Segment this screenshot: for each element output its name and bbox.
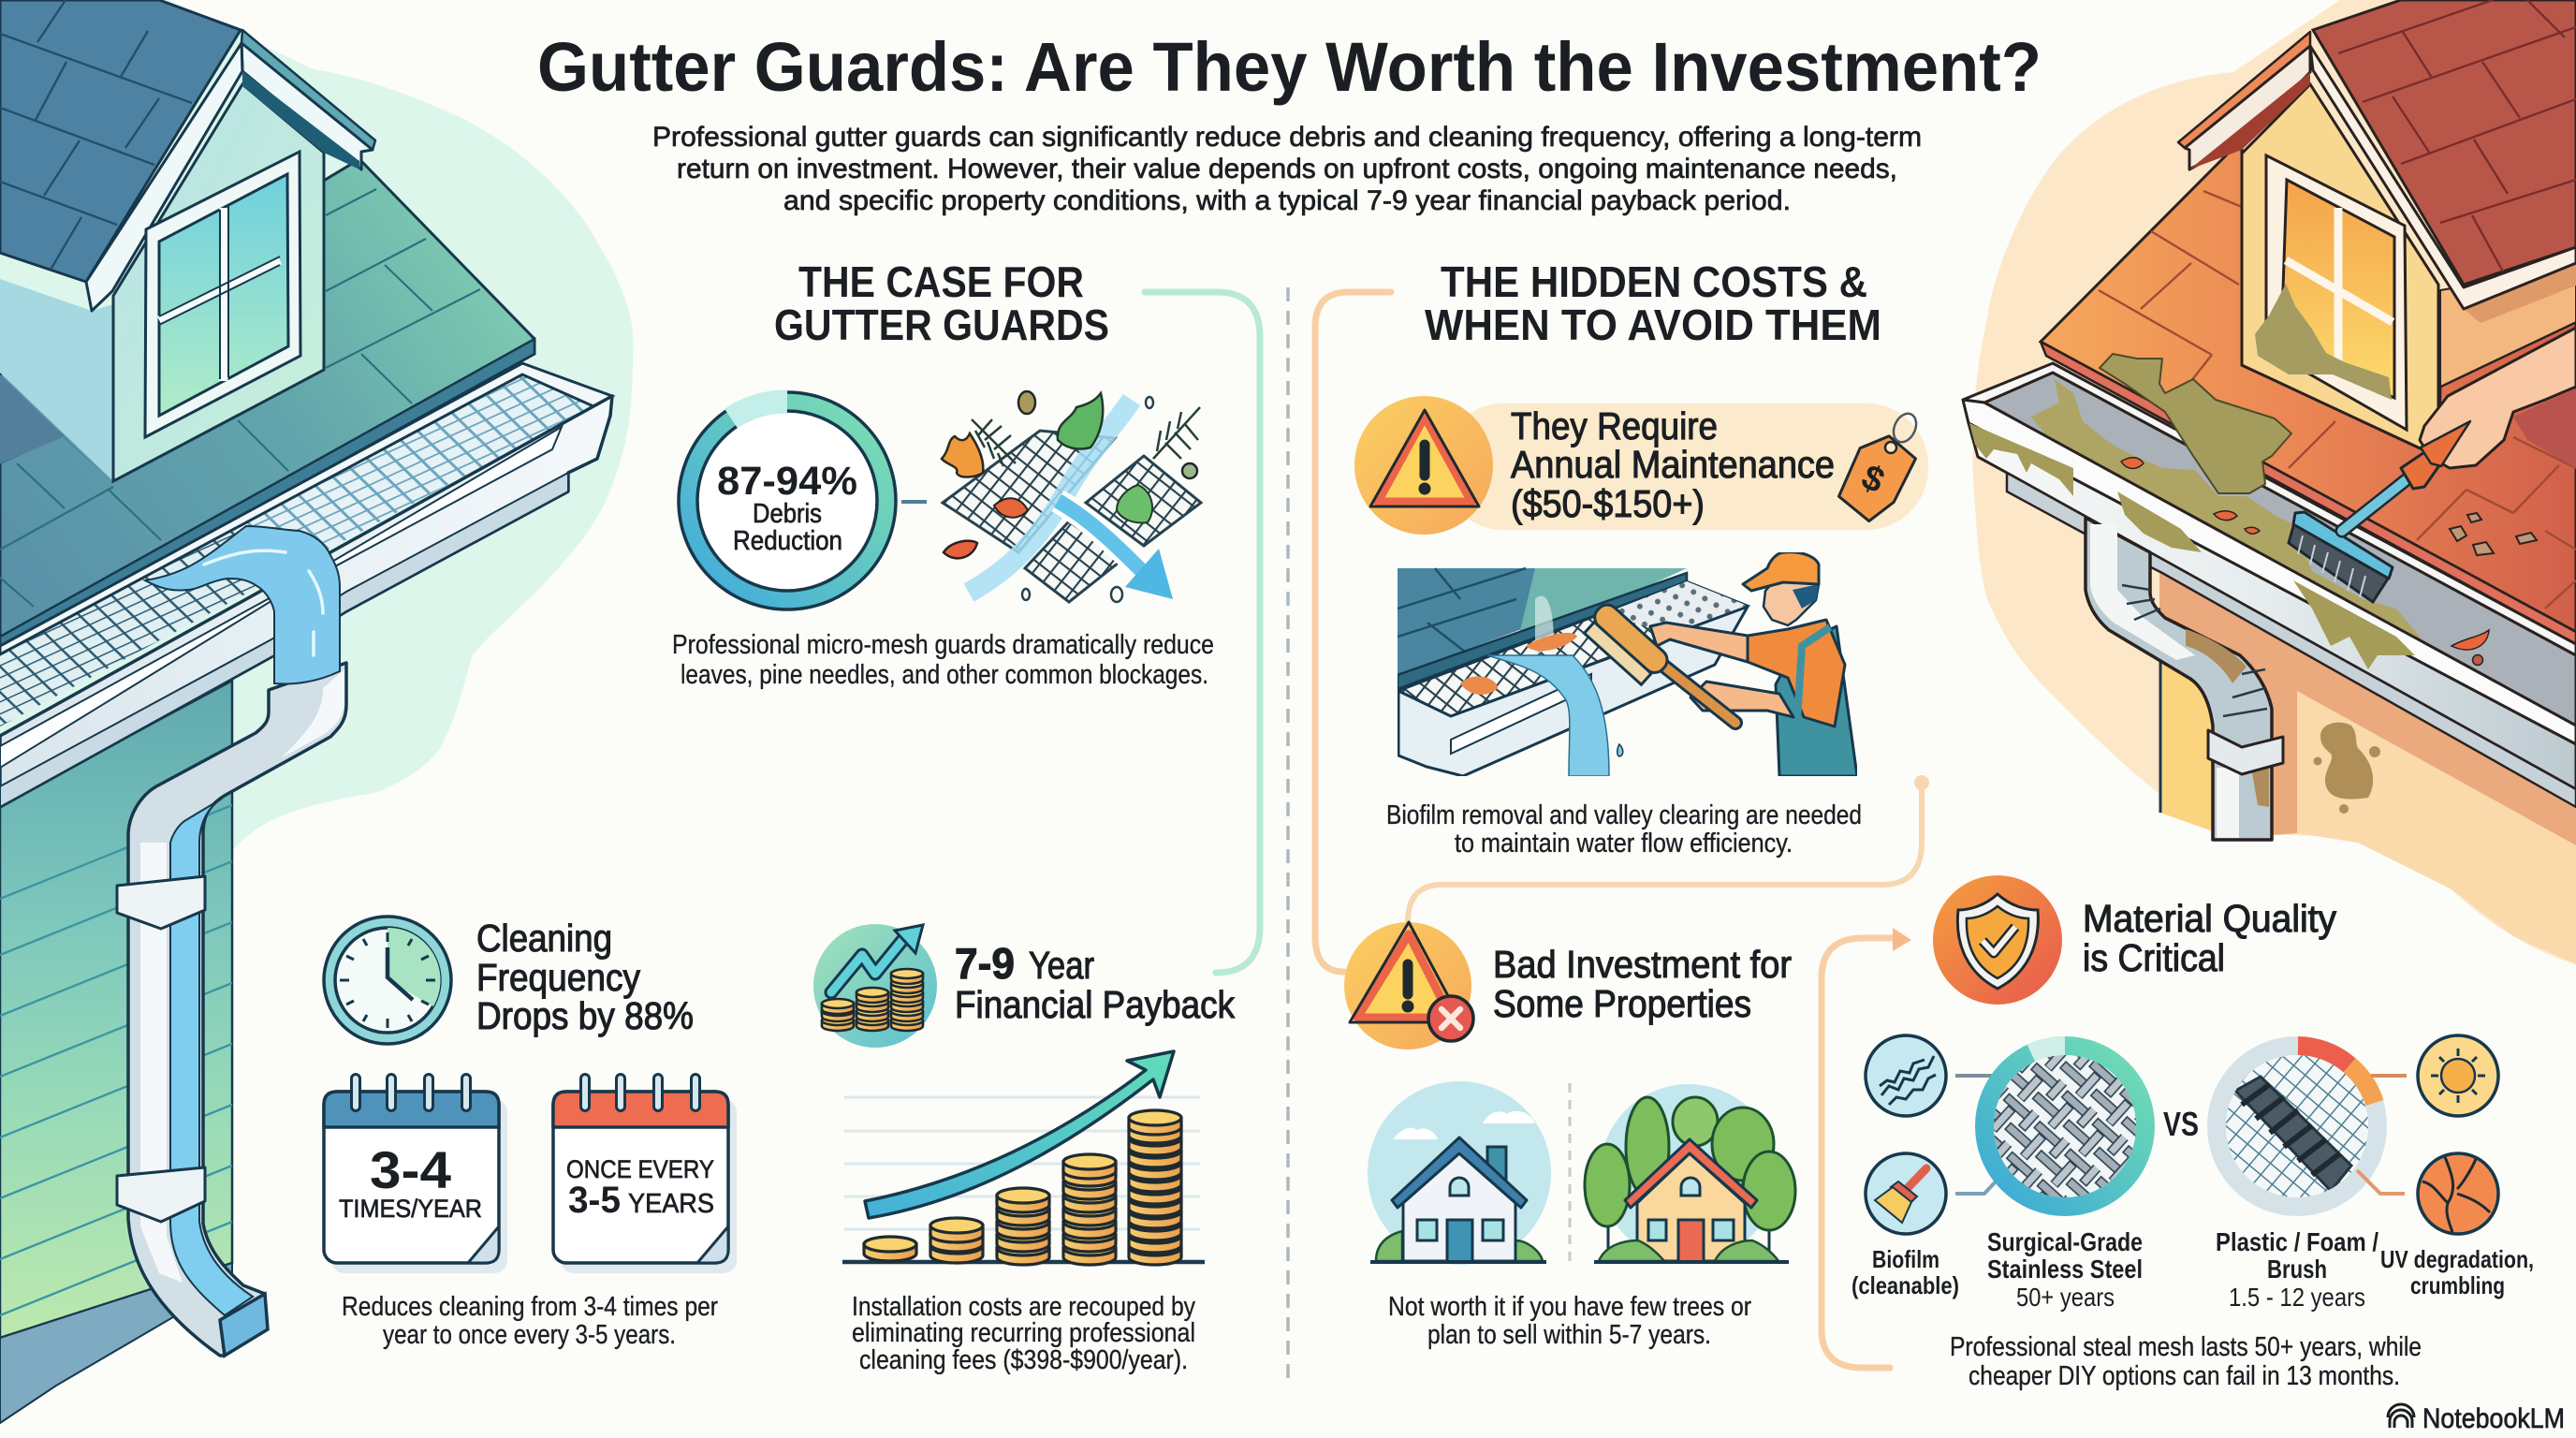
roof moss patch <box>2100 354 2291 493</box>
label: uv degradation: crumbling <box>2410 1271 2505 1299</box>
downspout highlight <box>140 669 344 1283</box>
description <box>852 1292 1195 1375</box>
front muck drips <box>1969 423 2415 669</box>
orange connector with arrow <box>1822 928 1911 1368</box>
label: biofilm: (cleanable) <box>1852 1271 1959 1299</box>
downspout bracket upper <box>117 876 205 929</box>
green connector <box>1145 292 1260 973</box>
description: eliminating recurring professional <box>852 1318 1195 1348</box>
donut chart: 87-94% <box>717 459 857 504</box>
heading: 7-9 <box>955 939 1015 988</box>
description: Reduces cleaning from 3-4 times per <box>342 1292 718 1322</box>
icon: warning with x <box>1344 922 1473 1049</box>
wall base <box>0 1263 232 1423</box>
description: cheaper DIY options can fail in 13 months. <box>1969 1361 2400 1391</box>
description <box>342 1292 718 1350</box>
heading pill <box>1442 404 1928 530</box>
heading <box>2083 897 2336 979</box>
calendar: before: TIMES/YEAR <box>339 1195 482 1223</box>
wall lower panel <box>2297 691 2576 964</box>
dormer face <box>113 84 324 481</box>
panel: cleaning frequency <box>324 917 737 1350</box>
wall stain <box>2314 723 2380 814</box>
label: biofilm <box>1852 1245 1959 1299</box>
upper roof <box>2313 0 2576 285</box>
orange connector left <box>1315 292 1391 972</box>
connector <box>1955 1074 1992 1078</box>
chart: coin stacks growth <box>842 1051 1205 1265</box>
roof debris <box>2450 513 2537 555</box>
description <box>1386 800 1862 858</box>
description: year to once every 3-5 years. <box>383 1320 676 1350</box>
gutter leaves in muck <box>2121 458 2260 534</box>
left house illustration <box>0 0 612 1423</box>
downspout stain <box>2186 629 2269 807</box>
connector <box>1955 1181 1996 1194</box>
gutter water flow <box>145 526 340 683</box>
wall yellow <box>2160 658 2213 831</box>
downspout <box>2086 518 2272 840</box>
dormer soffit <box>242 71 359 169</box>
label: plastic foam brush <box>2216 1227 2378 1312</box>
description: leaves, pine needles, and other common blockages. <box>681 660 1208 690</box>
heading: ($50-$150+) <box>1511 482 1705 525</box>
icon: house with many trees <box>1585 1084 1795 1262</box>
icon: cracked surface <box>2418 1153 2498 1234</box>
heading: hidden costs <box>1425 257 1881 349</box>
orange connector middle <box>1408 775 1929 922</box>
description <box>1388 1292 1751 1350</box>
icon: shield <box>1933 875 2062 1005</box>
downspout collar <box>2208 730 2283 774</box>
gutter lower band <box>0 473 568 807</box>
dormer side shadow <box>2464 263 2576 323</box>
right gable trim <box>2310 46 2576 309</box>
gutter back lip <box>1963 363 2576 655</box>
heading: Financial Payback <box>955 983 1235 1026</box>
gutter interior <box>1984 373 2576 726</box>
steel mesh circle <box>1984 1046 2145 1207</box>
downspout ridges <box>2122 585 2267 716</box>
label: stainless steel: 50+ years <box>2016 1283 2115 1312</box>
dormer side wall <box>0 279 113 481</box>
wall <box>0 681 232 1338</box>
label: plastic foam brush: 1.5 - 12 years <box>2229 1283 2365 1312</box>
gutter crumb <box>2473 655 2482 665</box>
heading: Annual Maintenance <box>1511 443 1835 486</box>
gutter highlight <box>0 427 562 768</box>
gutter muck <box>2031 379 2434 651</box>
downspout water stripe <box>170 799 253 1315</box>
gutter front lip <box>1963 400 2576 744</box>
heading: Bad Investment for <box>1493 943 1792 986</box>
downspout outlet <box>220 1294 268 1356</box>
heading: They Require <box>1511 404 1718 448</box>
calendar: after: YEARS <box>628 1189 714 1219</box>
description: cleaning fees ($398-$900/year). <box>859 1345 1188 1375</box>
icon: biofilm texture <box>1866 1035 1946 1116</box>
wall band <box>2159 562 2576 845</box>
calendar: before: 3-4 <box>370 1140 451 1199</box>
description: Professional micro-mesh guards dramatically reduce <box>672 630 1214 660</box>
gutter mesh <box>0 374 593 726</box>
downspout bracket lower <box>117 1167 205 1222</box>
panel: financial payback <box>813 924 1235 1375</box>
heading: Year <box>1029 944 1094 987</box>
intro paragraph: Professional gutter guards can significantly reduce debris and cleaning frequency, offering a long-term <box>652 122 1922 153</box>
connector dash <box>901 500 927 504</box>
panel: debris reduction <box>672 391 1214 690</box>
icon: sun <box>2418 1035 2498 1116</box>
left rake strip <box>2178 32 2310 148</box>
heading: the case for gutter guards: GUTTER GUARDS <box>774 301 1109 349</box>
description: Biofilm removal and valley clearing are needed <box>1386 800 1862 830</box>
brush <box>2289 421 2470 602</box>
label: plastic foam brush: Plastic / Foam / <box>2216 1227 2378 1256</box>
gable left trim <box>86 43 242 311</box>
heading <box>1511 404 1835 525</box>
eave shadow band <box>0 339 534 650</box>
connector <box>2371 1074 2407 1078</box>
label: biofilm: Biofilm <box>1872 1245 1939 1273</box>
label: stainless steel: Surgical-Grade <box>1987 1227 2143 1256</box>
label: stainless steel: Stainless Steel <box>1987 1255 2143 1284</box>
upper roof <box>0 0 241 282</box>
panel: annual maintenance <box>1354 396 1928 858</box>
calendar: before <box>324 1078 507 1273</box>
description: Installation costs are recouped by <box>852 1292 1195 1322</box>
panel: bad investment <box>1344 922 1795 1350</box>
icon: clock <box>324 917 451 1044</box>
dormer side wall <box>2440 267 2576 387</box>
center dashed divider <box>1286 287 1290 1380</box>
icon: mesh with water and leaves <box>942 391 1201 602</box>
wall left line <box>2159 658 2162 813</box>
dormer face <box>2242 84 2438 457</box>
roof shadow <box>0 374 109 479</box>
dormer window <box>2255 155 2407 430</box>
label: uv degradation <box>2380 1245 2534 1299</box>
handle grip <box>2421 421 2470 466</box>
eave edge <box>2041 342 2576 644</box>
gable top strip <box>242 30 375 150</box>
icon: price tag <box>1837 410 1921 524</box>
background blob: peach <box>1973 0 2576 964</box>
background blob: mint <box>0 0 634 880</box>
left soffit <box>2189 72 2310 169</box>
illustration: worker cleaning gutter <box>1398 552 1857 776</box>
label: uv degradation: UV degradation, <box>2380 1245 2534 1273</box>
gutter front face <box>1969 423 2576 789</box>
intro paragraph: and specific property conditions, with a typical 7-9 year financial payback period. <box>783 185 1791 216</box>
connector <box>2357 1170 2405 1194</box>
description: plan to sell within 5-7 years. <box>1427 1320 1711 1350</box>
heading <box>476 917 694 1037</box>
main roof <box>2041 139 2576 632</box>
gable right trim <box>242 43 373 169</box>
main roof <box>0 159 534 650</box>
heading: Material Quality <box>2083 897 2336 940</box>
gutter back lip <box>0 363 612 654</box>
description: to maintain water flow efficiency. <box>1455 829 1793 858</box>
donut chart <box>679 392 896 609</box>
downspout highlight <box>2090 524 2239 838</box>
heading <box>955 939 1235 1026</box>
title: Gutter Guards: Are They Worth the Investment? <box>537 28 2042 106</box>
vs: VS <box>2163 1105 2199 1143</box>
heading: hidden costs: WHEN TO AVOID THEM <box>1425 301 1881 349</box>
plastic brush circle <box>2217 1046 2378 1207</box>
fascia <box>2007 473 2576 807</box>
downspout <box>128 663 346 1356</box>
label: stainless steel <box>1987 1227 2143 1312</box>
intro paragraph <box>652 122 1922 216</box>
icon: warning <box>1354 396 1493 535</box>
near gutter mesh <box>0 529 305 726</box>
panel: material quality <box>1852 875 2534 1391</box>
calendar: after: 3-5 <box>568 1180 621 1221</box>
description: Not worth it if you have few trees or <box>1388 1292 1751 1322</box>
left gable trim <box>2185 46 2310 169</box>
icon: house with few trees <box>1368 1081 1551 1265</box>
description: Professional steal mesh lasts 50+ years, while <box>1950 1332 2422 1362</box>
heading: Cleaning <box>476 917 612 960</box>
hand <box>2420 328 2576 468</box>
intro paragraph: return on investment. However, their value depends on upfront costs, ongoing maintenance needs, <box>677 154 1897 184</box>
heading: Some Properties <box>1493 982 1751 1025</box>
icon: cleaning brush <box>1866 1153 1946 1234</box>
heading: hidden costs: THE HIDDEN COSTS & <box>1441 257 1867 306</box>
label: plastic foam brush: Brush <box>2267 1255 2327 1284</box>
donut chart: Debris <box>753 499 822 529</box>
heading: Frequency <box>476 956 640 999</box>
donut chart: Reduction <box>733 526 842 556</box>
roof shadow under arm <box>2513 389 2576 468</box>
heading: the case for gutter guards: THE CASE FOR <box>798 257 1084 306</box>
heading: Drops by 88% <box>476 994 694 1037</box>
calendar: after: ONCE EVERY <box>566 1155 714 1183</box>
heading: the case for gutter guards <box>774 257 1109 349</box>
icon: coins and arrow <box>813 924 937 1048</box>
heading: is Critical <box>2083 936 2225 979</box>
heading <box>1493 943 1792 1025</box>
dormer window <box>145 152 300 437</box>
description <box>672 630 1214 690</box>
icon: price tag: $ <box>1855 458 1890 502</box>
right house illustration <box>1963 0 2576 964</box>
description <box>1950 1332 2422 1391</box>
gutter leaf <box>2452 630 2489 650</box>
gutter front <box>0 396 612 807</box>
small dashed divider <box>1569 1083 1571 1262</box>
worker <box>1650 552 1857 776</box>
calendar: after <box>553 1078 737 1273</box>
